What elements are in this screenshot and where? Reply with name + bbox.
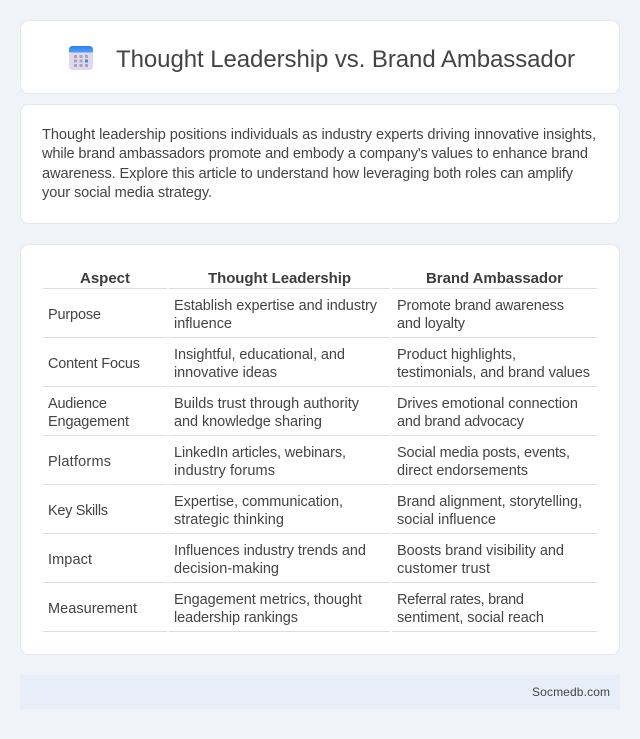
table header: Aspect: [80, 270, 130, 287]
row: Impact: Influences industry trends and: [174, 543, 366, 559]
text block: introduction: Thought leadership positions individuals as industry experts driving innovative insights,: [42, 127, 596, 143]
row: Purpose: Purpose: [48, 307, 101, 323]
row: Measurement: sentiment, social reach: [397, 610, 544, 626]
panel: title card: [20, 20, 620, 94]
row: Measurement: [48, 592, 544, 626]
row: Impact: customer trust: [397, 561, 490, 577]
row: Impact: Impact: [48, 552, 92, 568]
row: Key Skills: Key Skills: [48, 503, 108, 519]
row: Purpose: Promote brand awareness: [397, 298, 564, 314]
row: Audience Engagement: Engagement: [48, 414, 129, 430]
row: Audience Engagement: Builds trust through authority: [174, 396, 360, 412]
row: Purpose: [48, 298, 564, 332]
text block: introduction: awareness. Explore this article to understand how leveraging both roles can amplify: [42, 166, 574, 182]
footer credit: Socmedb.com: [532, 685, 610, 699]
row: Purpose: and loyalty: [397, 316, 466, 332]
table header: Thought Leadership: [208, 270, 351, 287]
row: Key Skills: Brand alignment, storytelling,: [397, 494, 582, 510]
row: Content Focus: Content Focus: [48, 356, 140, 372]
row: Impact: Boosts brand visibility and: [397, 543, 564, 559]
panel: comparison table card: [20, 244, 620, 654]
row: Platforms: direct endorsements: [397, 463, 528, 479]
row: Purpose: influence: [174, 316, 232, 332]
row: Content Focus: [48, 347, 590, 381]
table header: Brand Ambassador: [426, 270, 563, 287]
row: Audience Engagement: Audience: [48, 396, 107, 412]
row: Key Skills: Expertise, communication,: [174, 494, 343, 510]
table header: [80, 270, 563, 287]
row: Key Skills: [48, 494, 582, 528]
row: Measurement: leadership rankings: [174, 610, 298, 626]
row: Measurement: Referral rates, brand: [397, 592, 524, 608]
title: Thought Leadership vs. Brand Ambassador: [116, 46, 575, 73]
row: Impact: [48, 543, 564, 577]
row: Platforms: industry forums: [174, 463, 275, 479]
footer bar: [20, 675, 620, 709]
text block: introduction: [41, 127, 596, 201]
row: Measurement: Engagement metrics, thought: [174, 592, 362, 608]
row: Content Focus: Insightful, educational, and: [174, 347, 345, 363]
row: Key Skills: strategic thinking: [174, 512, 284, 528]
row: Audience Engagement: [48, 396, 578, 430]
panel: introduction card: [20, 104, 620, 224]
row: Audience Engagement: and knowledge sharing: [174, 414, 322, 430]
row: Platforms: Social media posts, events,: [397, 445, 570, 461]
row: Key Skills: social influence: [397, 512, 496, 528]
row: Platforms: LinkedIn articles, webinars,: [174, 445, 346, 461]
row: Purpose: Establish expertise and industry: [174, 298, 378, 314]
text block: introduction: your social media strategy.: [42, 185, 212, 201]
text block: introduction: while brand ambassadors promote and embody a company's values to enhance brand: [41, 146, 588, 162]
row: Platforms: Platforms: [48, 454, 111, 470]
row: Platforms: [48, 445, 570, 479]
row: Audience Engagement: Drives emotional connection: [397, 396, 578, 412]
row: Content Focus: Product highlights,: [397, 347, 516, 363]
row: Impact: decision-making: [174, 561, 279, 577]
row: Audience Engagement: and brand advocacy: [397, 414, 525, 430]
row: Content Focus: testimonials, and brand values: [397, 365, 590, 381]
row: Content Focus: innovative ideas: [174, 365, 277, 381]
row: Measurement: Measurement: [48, 601, 137, 617]
icon: calendar: [69, 46, 93, 70]
